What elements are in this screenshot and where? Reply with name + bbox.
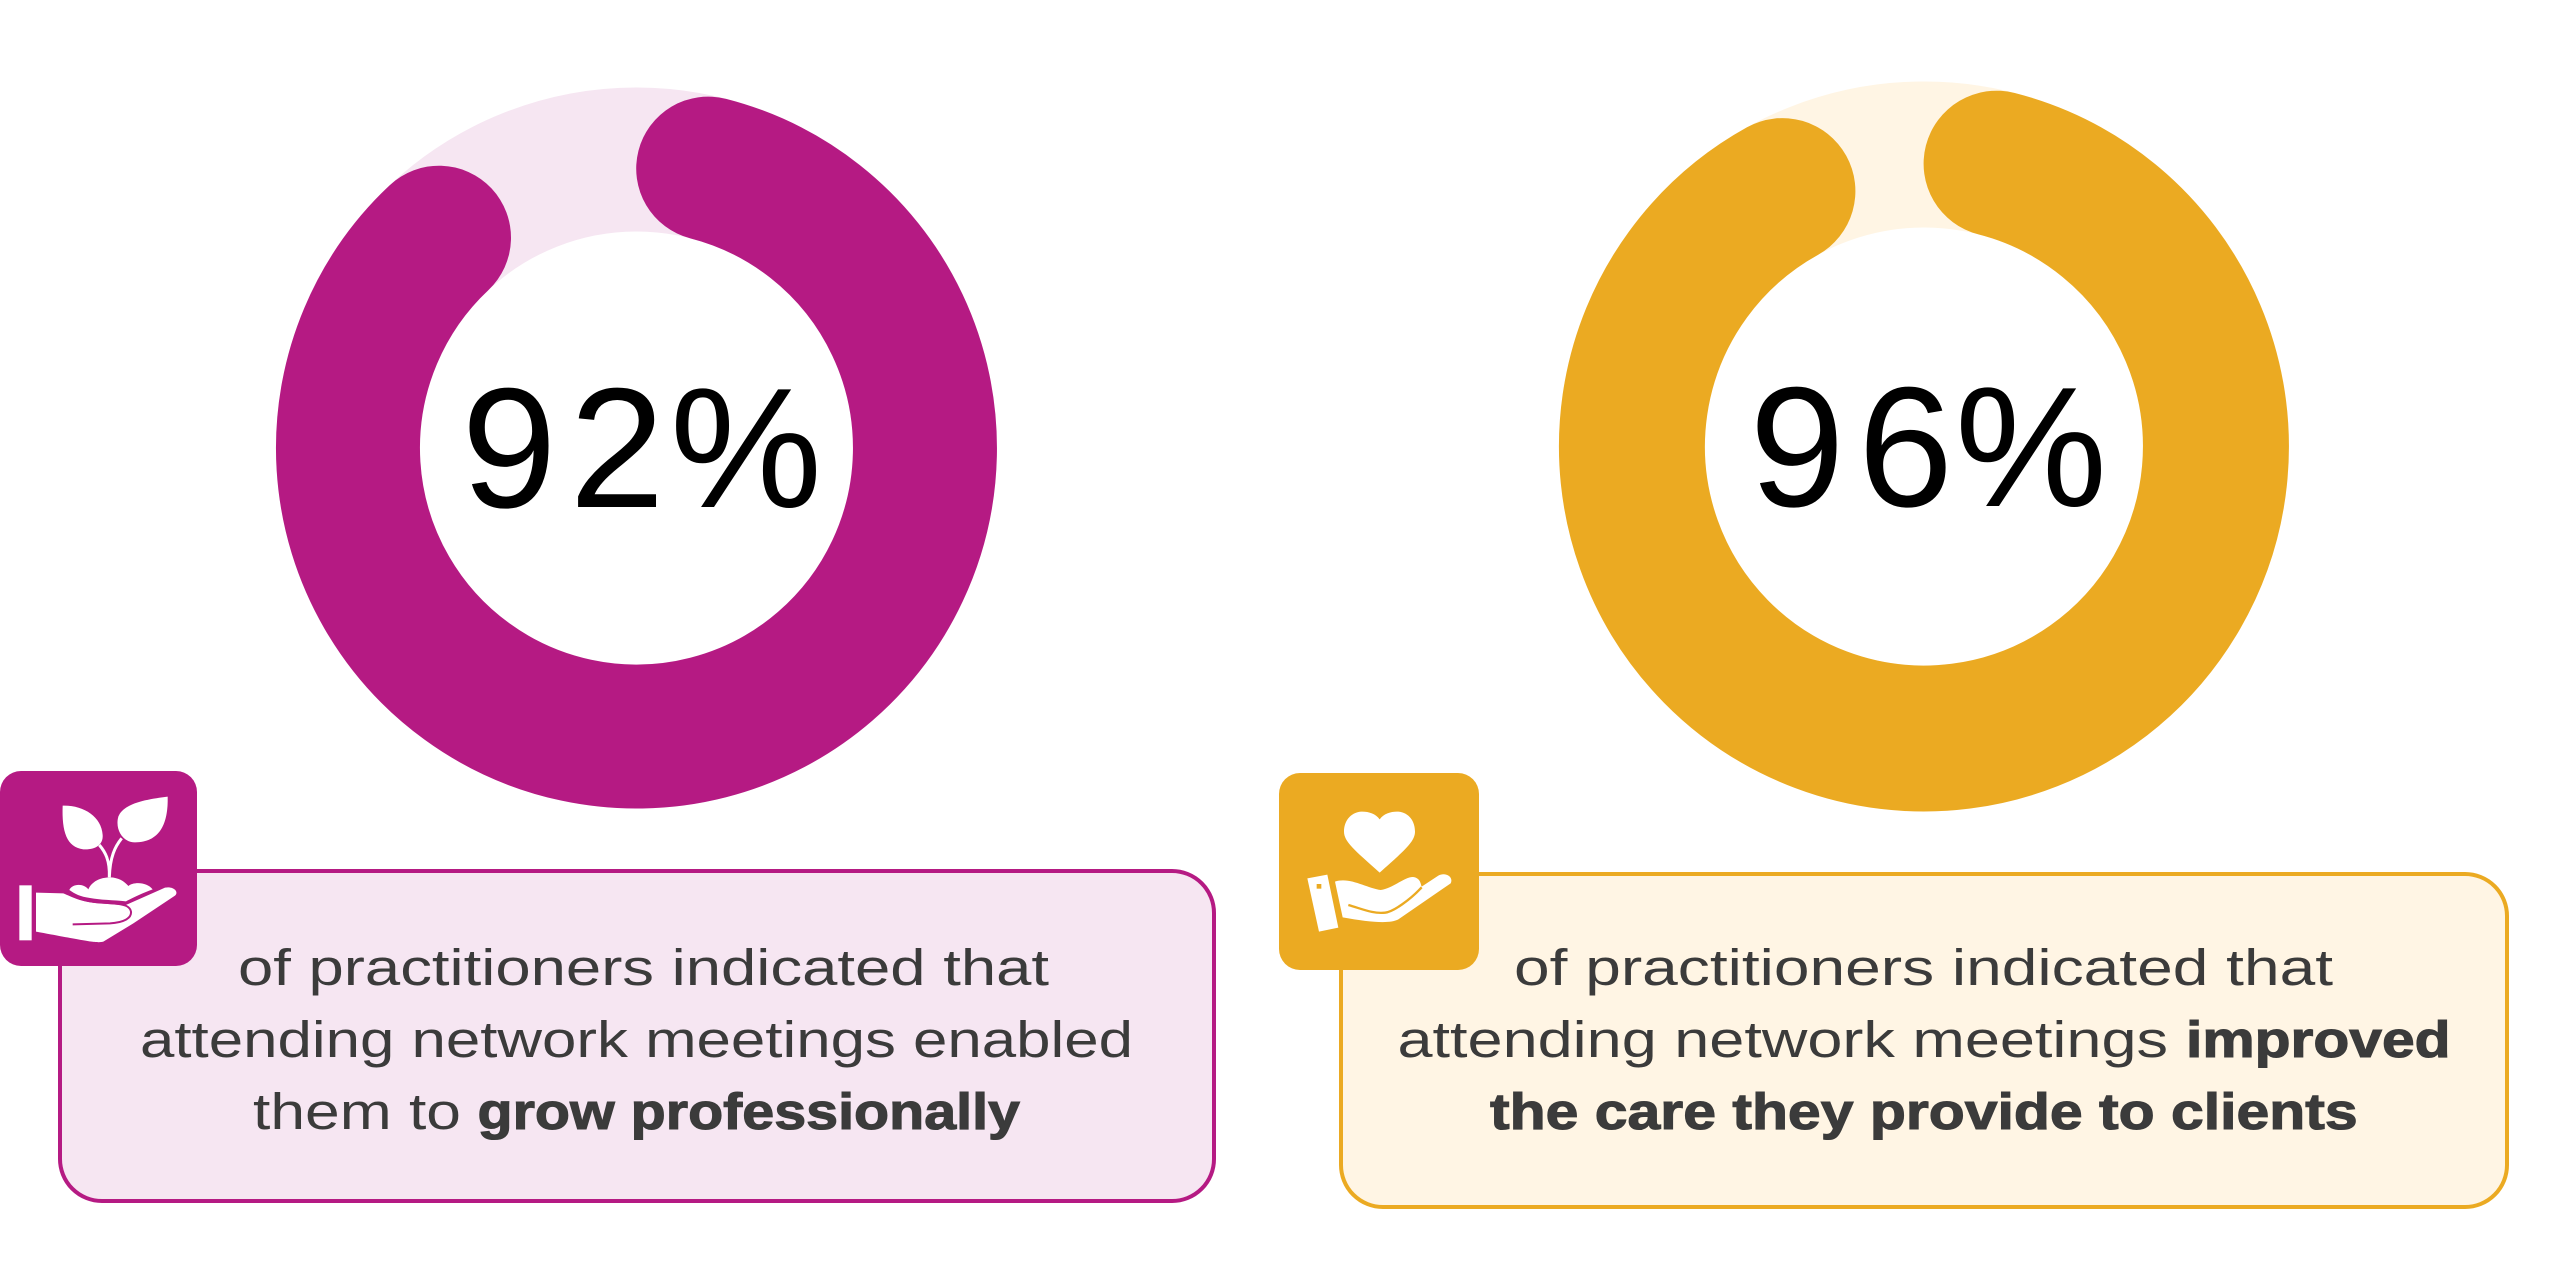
caption text: professional growth: of practitioners indicated that — [238, 939, 1049, 996]
icon: hand holding heart — [1279, 773, 1479, 970]
caption box: improved care — [1341, 874, 2507, 1207]
caption text: improved care: improved — [2186, 1011, 2451, 1068]
caption text: professional growth — [140, 939, 1133, 1140]
statistic: 92%: 92% — [462, 353, 822, 544]
icon: hand holding seedling — [0, 771, 197, 966]
donut chart: 96% — [1632, 154, 2216, 739]
caption text: professional growth: attending network meetings enabled — [140, 1011, 1133, 1068]
caption box: professional growth — [60, 871, 1214, 1201]
donut chart: 92% — [348, 160, 925, 737]
caption text: improved care: the care they provide to clients — [1490, 1083, 2358, 1140]
panel: professional growth — [0, 160, 1214, 1201]
panel: improved client care — [1279, 154, 2507, 1207]
statistic: 96%: 96% — [1750, 352, 2107, 543]
caption text: professional growth: grow professionally — [478, 1083, 1021, 1140]
caption text: improved care — [1398, 939, 2451, 1140]
caption text: professional growth: them to — [253, 1083, 461, 1140]
caption text: improved care: of practitioners indicated that — [1514, 939, 2333, 996]
caption text: improved care: attending network meetings — [1398, 1011, 2168, 1068]
